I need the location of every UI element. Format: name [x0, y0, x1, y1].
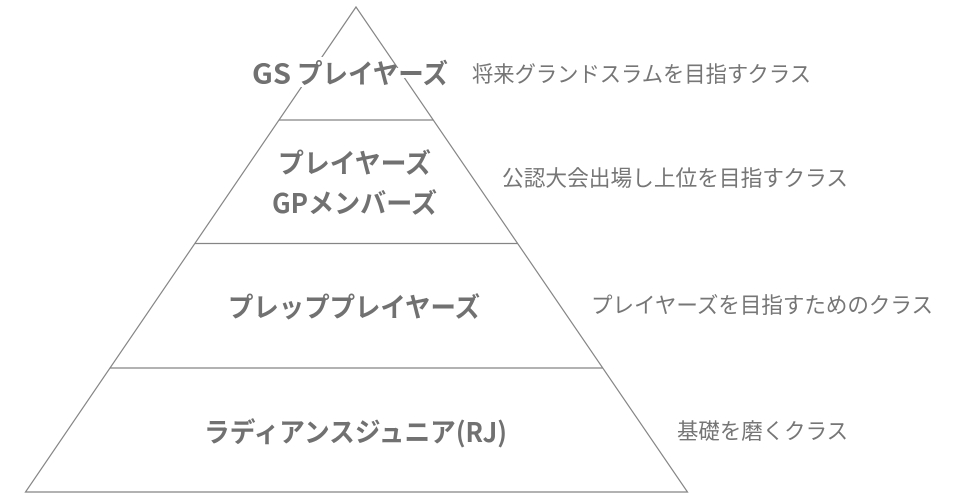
tier 4 label: radiance junior: ラディアンスジュニア(RJ): [204, 411, 507, 450]
tier 1 description: 将来グランドスラムを目指すクラス: [472, 57, 811, 89]
tier 1 label: GS players: プレイヤーズ: [297, 52, 448, 92]
pyramid outline: [26, 7, 688, 492]
tier 1 label: GS players: GS: [252, 52, 291, 92]
tier 2 label: players / GP members: プレイヤーズ: [278, 142, 431, 181]
tier 3 description: プレイヤーズを目指すためのクラス: [591, 288, 933, 320]
tier 3 label: prep players: プレッププレイヤーズ: [228, 286, 480, 325]
tier 4 description: 基礎を磨くクラス: [677, 414, 848, 446]
tier 2 label: players / GP members: GPメンバーズ: [272, 182, 437, 221]
tier 2 description: 公認大会出場し上位を目指すクラス: [502, 161, 848, 193]
tier 2 label: players / GP members: [272, 142, 437, 221]
